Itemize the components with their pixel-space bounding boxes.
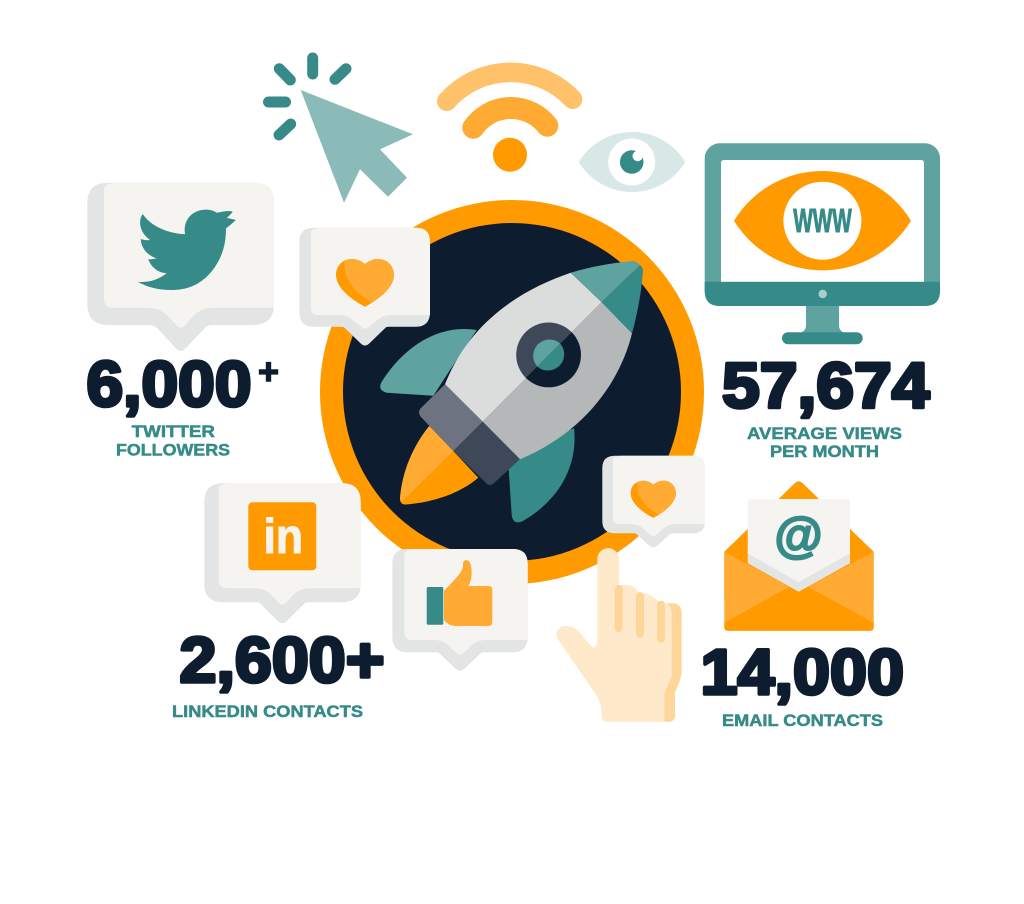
icon: thumbs up: [427, 560, 492, 626]
icon: heart: [336, 259, 394, 307]
speech bubble: twitter: [87, 183, 274, 351]
stat: 14,000: 14,000: [700, 636, 904, 708]
icon: twitter bird: [138, 210, 236, 290]
stat: 6,000+: 6,000: [86, 348, 252, 420]
icon: linkedin logo: [248, 502, 316, 570]
label: email contacts: EMAIL CONTACTS: [722, 712, 883, 730]
icon: pointing hand: [557, 548, 682, 722]
speech bubble: heart right: [602, 456, 705, 548]
panel: twitter: [86, 183, 279, 460]
panel: website views: [705, 143, 940, 461]
central circle badge: [320, 200, 704, 584]
stat: 57,674: 57,674: [722, 350, 930, 422]
speech bubble: thumbs up: [392, 549, 528, 671]
label: average views per month: [747, 425, 902, 461]
stat: 6,000+: +: [258, 351, 279, 392]
icon: eye: [579, 132, 685, 192]
label: linkedin contacts: LINKEDIN CONTACTS: [172, 703, 363, 721]
speech bubble: linkedin: [204, 483, 361, 623]
icon: wifi: [447, 72, 573, 172]
panel: email: [700, 481, 904, 730]
icon: envelope: @: [774, 508, 822, 562]
label: twitter followers: TWITTER: [132, 423, 215, 441]
label: average views per month: PER MONTH: [770, 443, 879, 461]
icon: envelope: [724, 481, 874, 631]
icon: heart: [631, 481, 676, 518]
icon: mouse cursor with click rays: [268, 58, 413, 203]
stat: 2,600+: 2,600+: [180, 624, 384, 696]
speech bubble: heart top: [299, 228, 430, 346]
icon: monitor: WWW: [793, 202, 852, 239]
label: twitter followers: [116, 423, 230, 460]
panel: linkedin: [172, 483, 384, 721]
label: average views per month: AVERAGE VIEWS: [747, 425, 902, 443]
label: twitter followers: FOLLOWERS: [116, 442, 230, 460]
icon: rocket: [380, 261, 643, 522]
icon: linkedin logo: in: [264, 510, 303, 564]
icon: monitor: [705, 143, 940, 344]
